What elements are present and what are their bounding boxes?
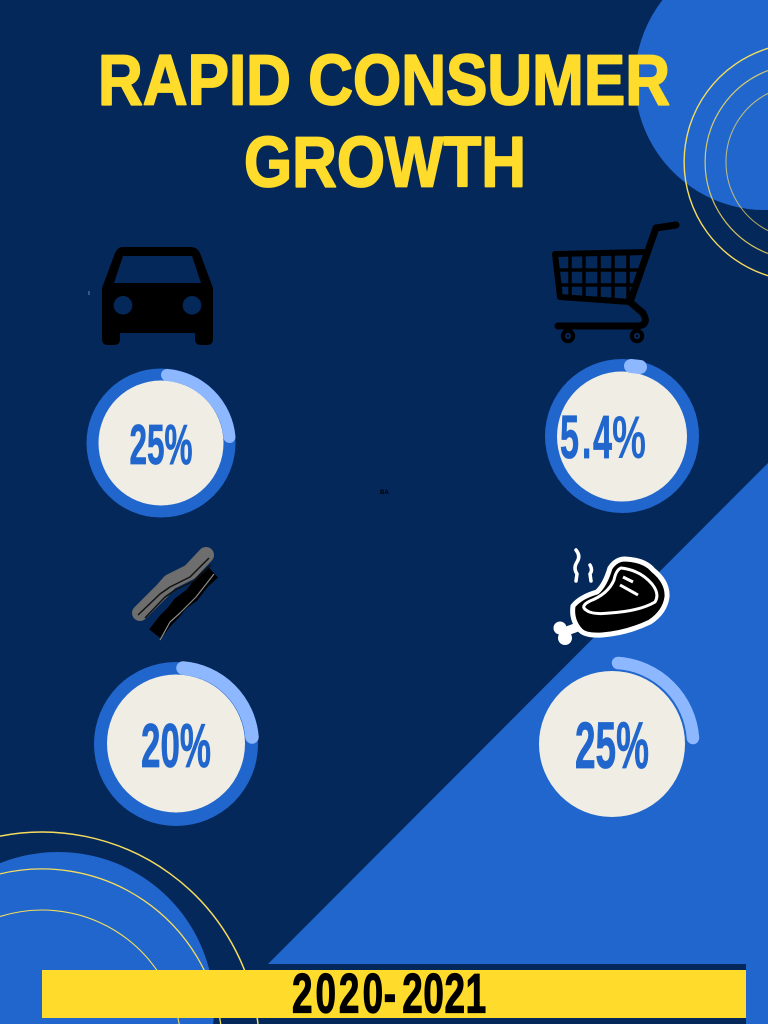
icon: car <box>102 247 213 345</box>
donut chart: bacon 20%: 20% <box>141 712 211 781</box>
bottom left concentric rings <box>0 832 258 1024</box>
icon: steak <box>554 550 667 645</box>
donut chart: meat 25%: 25% <box>575 708 649 782</box>
title: RAPID CONSUMER <box>98 42 670 120</box>
icon: bacon <box>138 555 214 640</box>
top right concentric rings <box>684 48 768 276</box>
title <box>98 42 670 202</box>
donut chart: shopping 5.4%: % <box>612 404 646 471</box>
donut chart: bacon 20% <box>94 662 258 826</box>
top right blue circle <box>635 0 768 210</box>
tiny stray label: BA <box>380 490 389 496</box>
donut chart: meat 25% <box>539 663 693 817</box>
date banner: 2020-2021 <box>292 963 486 1024</box>
date banner <box>42 963 746 1024</box>
diagonal blue panel <box>268 463 768 1024</box>
donut chart: shopping 5.4%: 5.4 <box>560 404 612 472</box>
icon: shopping cart <box>555 225 676 341</box>
stray speck <box>88 291 90 295</box>
bottom left blue circle <box>0 852 214 1024</box>
donut chart: car 25%: 25% <box>130 413 192 477</box>
donut chart: car 25% <box>86 368 236 518</box>
donut chart: shopping 5.4% <box>545 359 699 513</box>
title: GROWTH <box>244 124 526 202</box>
